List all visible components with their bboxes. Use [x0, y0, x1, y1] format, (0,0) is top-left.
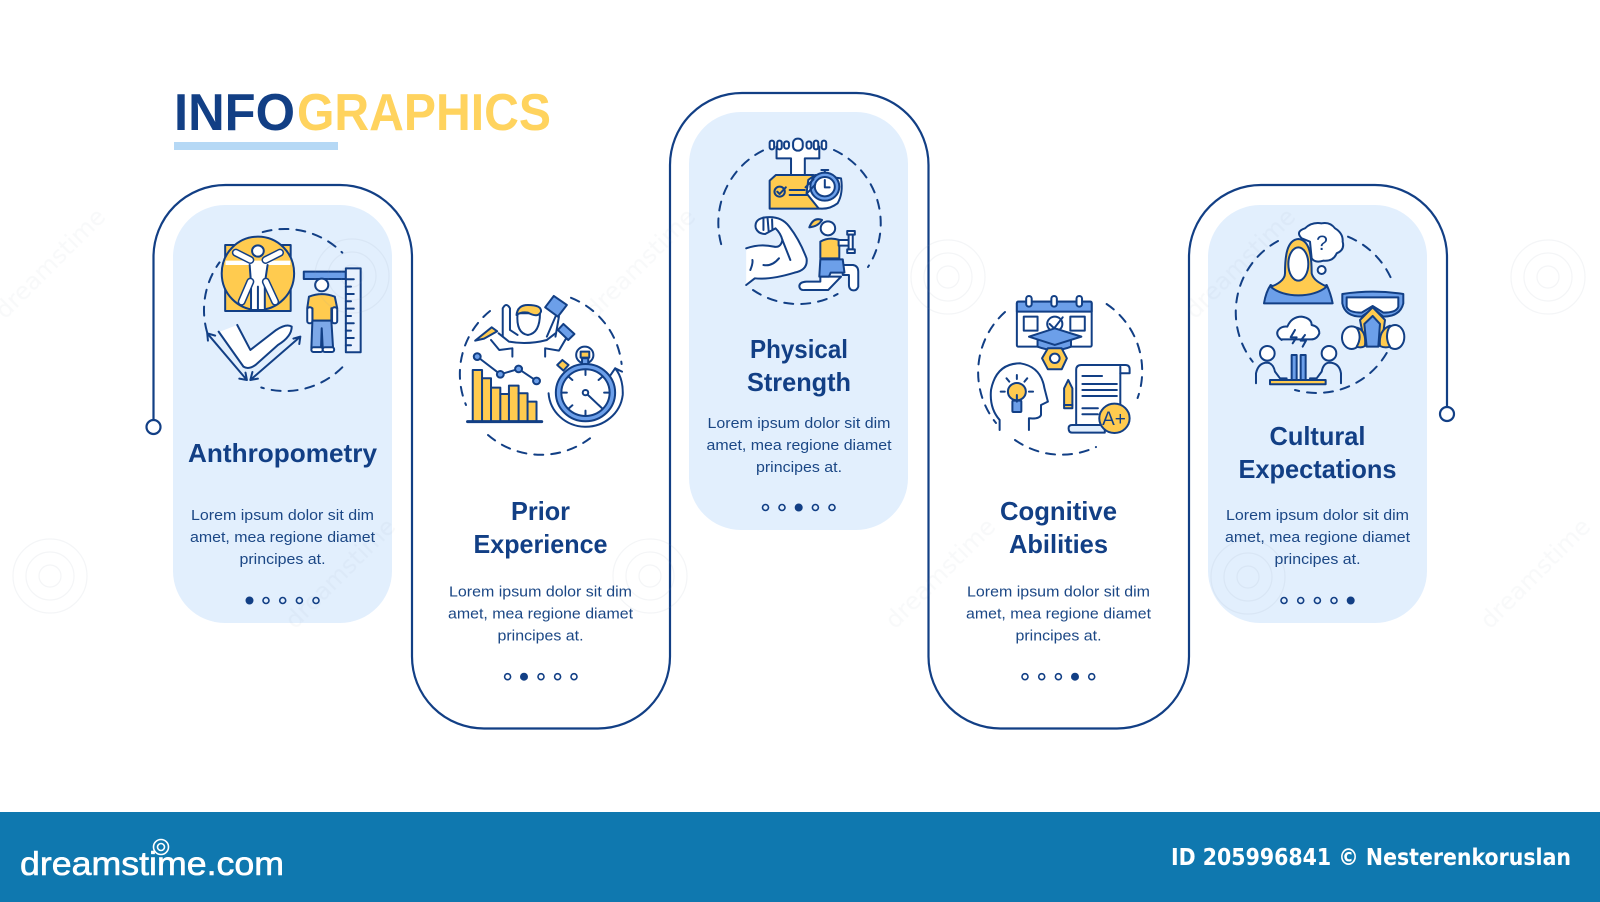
question mark: ? [1316, 232, 1328, 255]
icon: cognitive abilities [978, 296, 1142, 455]
text block: cognitive abilities [966, 584, 1152, 644]
text block: cognitive abilities: principes at. [1016, 628, 1102, 644]
text block: anthropometry: principes at. [240, 551, 326, 568]
text block: cultural expectations [1225, 507, 1411, 568]
panel: physical strength [706, 139, 892, 511]
footer logo: dreamstime.com [20, 845, 284, 882]
pagination dots: step 3 [762, 504, 835, 511]
text block: cultural expectations: amet, mea regione diamet [1225, 529, 1411, 546]
watermark layer: dreamstime [579, 203, 701, 324]
heading: physical strength: Strength [747, 367, 851, 397]
watermark layer: dreamstime [279, 513, 401, 634]
text block: cognitive abilities: amet, mea regione diamet [966, 606, 1152, 622]
heading: cognitive abilities [1000, 496, 1117, 559]
A+ grade label: A+ [1102, 409, 1126, 430]
watermark layer: dreamstime [1179, 203, 1301, 324]
panel background: anthropometry [173, 205, 392, 623]
heading: anthropometry: Anthropometry [188, 438, 378, 468]
panel: prior experience [448, 296, 634, 680]
icon: cultural expectations [1236, 223, 1404, 393]
heading: prior experience: Prior [511, 496, 570, 526]
heading: cognitive abilities: Abilities [1009, 529, 1108, 559]
text block: prior experience: amet, mea regione diamet [448, 606, 634, 622]
pagination dots: step 4 [1022, 674, 1095, 680]
pagination dots: step 2 [505, 674, 577, 680]
pagination dots: step 5 [1281, 597, 1354, 604]
panel: cultural expectations [1225, 223, 1411, 604]
icon: prior experience [460, 296, 623, 455]
text block: anthropometry: amet, mea regione diamet [190, 529, 376, 546]
panel: anthropometry [188, 229, 378, 604]
watermark layer: dreamstime [1474, 513, 1596, 634]
icon: physical strength [718, 139, 881, 304]
title underline [174, 142, 338, 150]
panel background: physical strength [689, 112, 908, 530]
text block: physical strength: Lorem ipsum dolor sit dim [708, 415, 890, 432]
title: INFO [174, 84, 295, 142]
text block: prior experience [448, 584, 634, 644]
panel background: cultural expectations [1208, 205, 1427, 623]
text block: cognitive abilities: Lorem ipsum dolor sit dim [967, 584, 1150, 600]
heading: cultural expectations: Cultural [1270, 421, 1366, 451]
icon: anthropometry [204, 229, 361, 391]
text block: physical strength: principes at. [756, 459, 842, 476]
text block: anthropometry [190, 507, 376, 568]
watermark layer: dreamstime [879, 513, 1001, 634]
heading: prior experience [474, 496, 608, 559]
text block: physical strength: amet, mea regione diamet [706, 437, 892, 454]
text block: cultural expectations: Lorem ipsum dolor sit dim [1226, 507, 1409, 524]
heading: cognitive abilities: Cognitive [1000, 496, 1117, 526]
panel: cognitive abilities [966, 296, 1152, 680]
text block: prior experience: principes at. [498, 628, 584, 644]
heading: cultural expectations [1238, 421, 1396, 484]
footer bar [0, 812, 1600, 902]
text block: physical strength [706, 415, 892, 476]
serpentine outline connecting all panels [146, 93, 1454, 728]
heading: physical strength [747, 334, 851, 397]
heading: cultural expectations: Expectations [1238, 454, 1396, 484]
pagination dots: step 1 [246, 597, 319, 604]
title: GRAPHICS [297, 84, 551, 142]
heading: physical strength: Physical [750, 334, 848, 364]
heading: prior experience: Experience [474, 529, 608, 559]
title [174, 84, 551, 142]
text block: cultural expectations: principes at. [1274, 551, 1360, 568]
text block: prior experience: Lorem ipsum dolor sit dim [449, 584, 632, 600]
watermark layer [0, 203, 1596, 634]
text block: anthropometry: Lorem ipsum dolor sit dim [191, 507, 374, 524]
